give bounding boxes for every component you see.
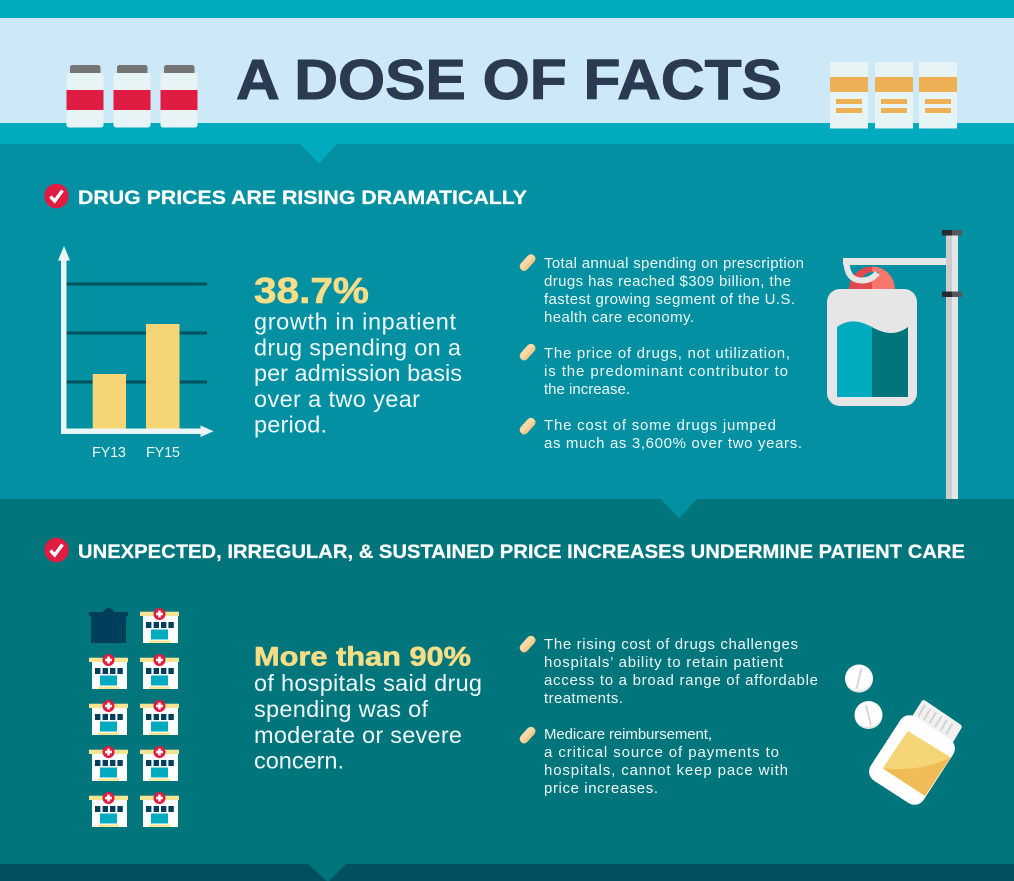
header band	[0, 0, 1014, 145]
bar chart: FY15	[146, 445, 180, 461]
stat: 38.7% growth: over a two year	[254, 386, 420, 412]
bullets: section 1: The price of drugs, not utilization,	[544, 345, 790, 362]
bullets: section 2	[518, 634, 818, 797]
bullets: section 1: Total annual spending on prescription	[544, 255, 804, 272]
icon: pill bottle	[865, 700, 962, 809]
stat: more than 90%: More than 90%	[254, 642, 471, 672]
bullets: section 2: price increases.	[544, 780, 658, 797]
stat: more than 90%: moderate or severe	[254, 722, 462, 748]
bullets: section 1	[518, 252, 804, 452]
bullets: section 1: the increase.	[544, 381, 630, 398]
bullets: section 2: hospitals, cannot keep pace with	[544, 762, 788, 779]
stat: 38.7% growth: drug spending on a	[254, 334, 462, 360]
section 2 background	[0, 499, 1014, 865]
bullets: section 1: as much as 3,600% over two years.	[544, 435, 802, 452]
bullets: section 2: access to a broad range of affordable	[544, 672, 818, 689]
bullets: section 1: The cost of some drugs jumped	[544, 417, 776, 434]
icon: IV bag on pole	[827, 230, 962, 499]
notch: header pointer	[300, 144, 337, 164]
bar chart: FY13	[92, 445, 126, 461]
bullets: section 1: is the predominant contributor to	[544, 363, 788, 380]
bullets: section 2: treatments.	[544, 690, 623, 707]
bullets: section 2: a critical source of payments to	[544, 744, 779, 761]
bar chart	[58, 246, 214, 461]
stat: more than 90%: concern.	[254, 748, 344, 774]
bullets: section 2: The rising cost of drugs challenges	[544, 636, 798, 653]
bullets: section 1: drugs has reached $309 billion, the	[544, 273, 791, 290]
footer band	[0, 864, 1014, 881]
stat: more than 90%	[254, 642, 482, 774]
heading: section 1: DRUG PRICES ARE RISING DRAMATICALLY	[78, 187, 527, 209]
icon: tablets	[845, 664, 882, 729]
notch: section 1 pointer	[661, 499, 697, 518]
section 1 background	[0, 144, 1014, 500]
icon grid: hospitals	[89, 608, 179, 827]
bullets: section 1: health care economy.	[544, 309, 694, 326]
stat: 38.7% growth: growth in inpatient	[254, 308, 456, 334]
heading: section 2: UNEXPECTED, IRREGULAR, & SUSTAINED PRICE INCREASES UNDERMINE PATIENT CARE	[78, 541, 965, 563]
bullets: section 2: hospitals’ ability to retain patient	[544, 654, 784, 671]
stat: more than 90%: of hospitals said drug	[254, 670, 482, 696]
icon: prescription labels	[830, 62, 957, 128]
bullets: section 1: fastest growing segment of the U.S.	[544, 291, 795, 308]
title: A DOSE OF FACTS	[236, 48, 782, 112]
stat: more than 90%: spending was of	[254, 696, 428, 722]
icon: highlighted dark hospital	[89, 608, 128, 643]
stat: 38.7% growth: per admission basis	[254, 360, 462, 386]
notch: section 2 pointer	[308, 864, 346, 881]
stat: 38.7% growth	[254, 270, 462, 438]
stat: 38.7% growth: period.	[254, 412, 327, 438]
icon: medicine jars	[66, 65, 198, 128]
stat: 38.7% growth: 38.7%	[254, 270, 369, 311]
bullets: section 2: Medicare reimbursement,	[544, 726, 712, 743]
